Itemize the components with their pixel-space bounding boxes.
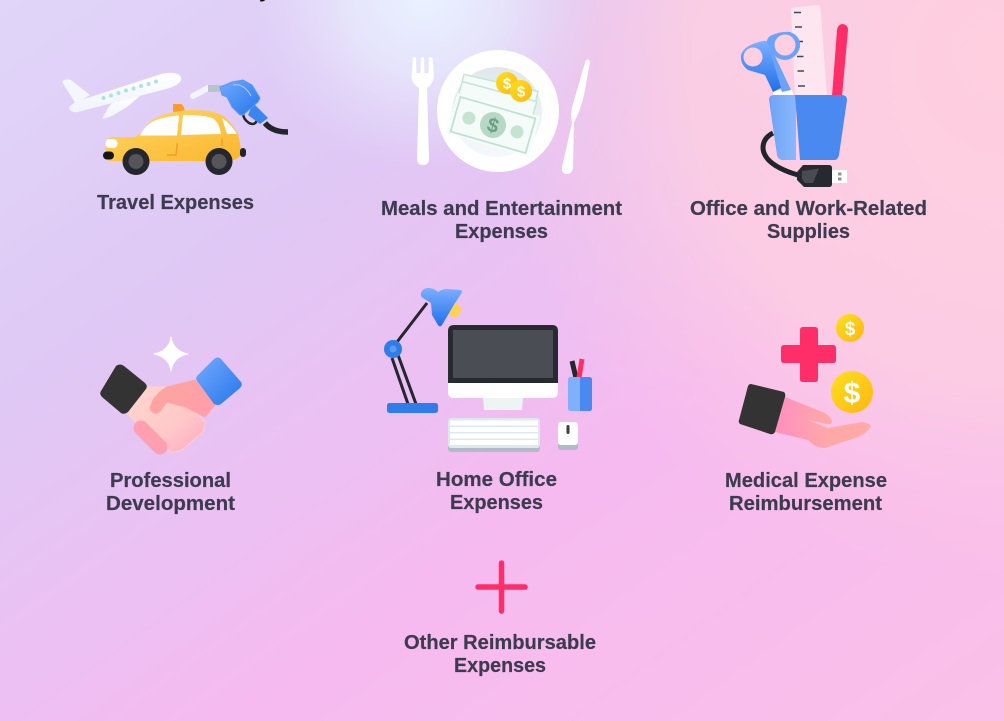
label: office and work-related supplies: Office and Work-Related [690,198,927,220]
label: medical expense reimbursement: Reimbursement [729,493,882,515]
label: other reimbursable expenses: Other Reimbursable [404,632,596,654]
icon: open hand [739,384,871,448]
label: professional development [106,470,235,515]
label: meals and entertainment expenses: Expenses [455,221,548,243]
icon: fork [412,57,434,165]
panel: professional development [100,337,242,515]
icon: plus [478,563,525,611]
label: office and work-related supplies: Supplies [767,221,850,243]
icon: keyboard [448,418,540,452]
label: meals and entertainment expenses: Meals and Entertainment [381,198,622,220]
icon: sparkle [154,337,188,371]
icon: mouse [558,422,578,450]
icon: small coin [836,314,864,342]
panel: other reimbursable [404,563,596,677]
icon: small coin: $ [845,319,856,340]
icon: ruler [791,5,827,96]
label: other reimbursable expenses [404,632,596,677]
label: travel expenses: Travel Expenses [97,192,254,214]
icon: handshake [100,358,242,453]
icon: cup [769,95,847,160]
panel: medical reimbursement [725,314,887,515]
icon: usb cable [763,133,847,187]
icon: desk lamp [384,288,462,413]
icon: airplane [62,73,181,119]
label: professional development: Professional [110,470,231,492]
panel: office supplies [690,5,927,243]
icon: knife [562,59,590,174]
label: office and work-related supplies [690,198,927,243]
label: professional development: Development [106,493,235,515]
icon: pen cup [568,359,592,411]
icon: plate with money [437,50,559,172]
icon: scissors [741,32,800,96]
label: home office expenses: Home Office [436,469,557,491]
label: other reimbursable expenses: Expenses [454,655,546,677]
label: home office expenses: Expenses [450,492,543,514]
icon: plate with money: $ [503,76,512,92]
icon: plate with money: $ [484,114,501,138]
icon: fuel nozzle [193,80,288,132]
icon: medical cross [781,327,836,382]
icon: large coin: $ [844,377,861,410]
panel: travel expenses [62,73,288,214]
icon: monitor [448,325,558,410]
label: medical expense reimbursement [725,470,887,515]
icon: plate with money: $ [517,84,526,100]
label: home office expenses [436,469,557,514]
panel: home office [384,288,592,514]
panel: meals and entertainment [381,50,622,243]
icon: pencil [832,24,848,96]
label: meals and entertainment expenses [381,198,622,243]
label: medical expense reimbursement: Medical Expense [725,470,887,492]
icon: large coin [831,371,873,413]
icon: taxi [103,104,246,175]
